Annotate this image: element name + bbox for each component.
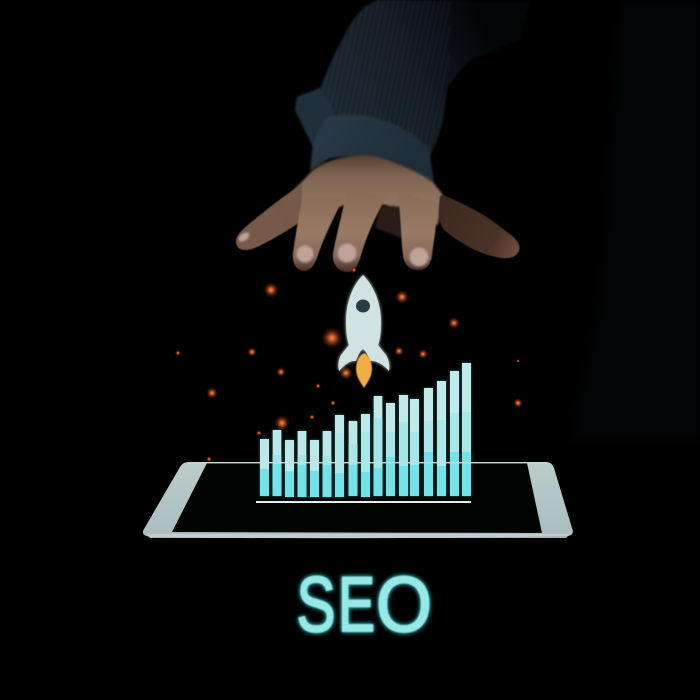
rocket body [338,275,389,371]
bar 8 [349,421,357,496]
faint dark suit body [570,0,700,440]
title: SEO: E [338,560,375,648]
index finger [398,192,438,270]
bar 4 [298,431,306,497]
shirt sleeve [295,0,530,170]
rocket icon [338,275,389,388]
bar 15 [437,381,446,496]
bar chart [260,363,471,497]
middle finger [333,190,386,272]
bar 5 [310,440,319,497]
little finger [236,184,302,250]
bar 9 [361,414,370,497]
tablet [143,462,573,538]
sleeve and hand photo [236,0,530,272]
title: SEO: S [296,560,336,648]
rocket window [356,300,370,312]
bar 6 [323,431,331,497]
shadow between fingers [375,205,402,238]
bar 13 [410,399,419,496]
bar 7 [335,415,344,497]
bar 2 [273,430,281,496]
orange light particles [175,267,523,518]
shirt cuff [310,114,434,183]
bar 17 [462,363,471,496]
title: SEO [296,560,432,648]
back of hand [292,155,443,225]
thumb [439,195,520,258]
finger nails [237,231,428,266]
rocket flame [356,353,372,388]
chart baseline [256,501,471,503]
tablet screen [172,463,542,533]
bar 11 [386,403,395,496]
ring finger [293,197,344,271]
tablet lower edge [146,534,570,538]
title: SEO: O [376,560,432,648]
bar 16 [450,371,459,496]
bar 1 [260,439,269,496]
bar 3 [285,440,294,497]
bar 14 [424,388,433,496]
tablet top edge line over bars [188,462,546,464]
bar 12 [399,395,408,496]
bar 10 [374,396,382,496]
tablet frame [143,462,573,538]
